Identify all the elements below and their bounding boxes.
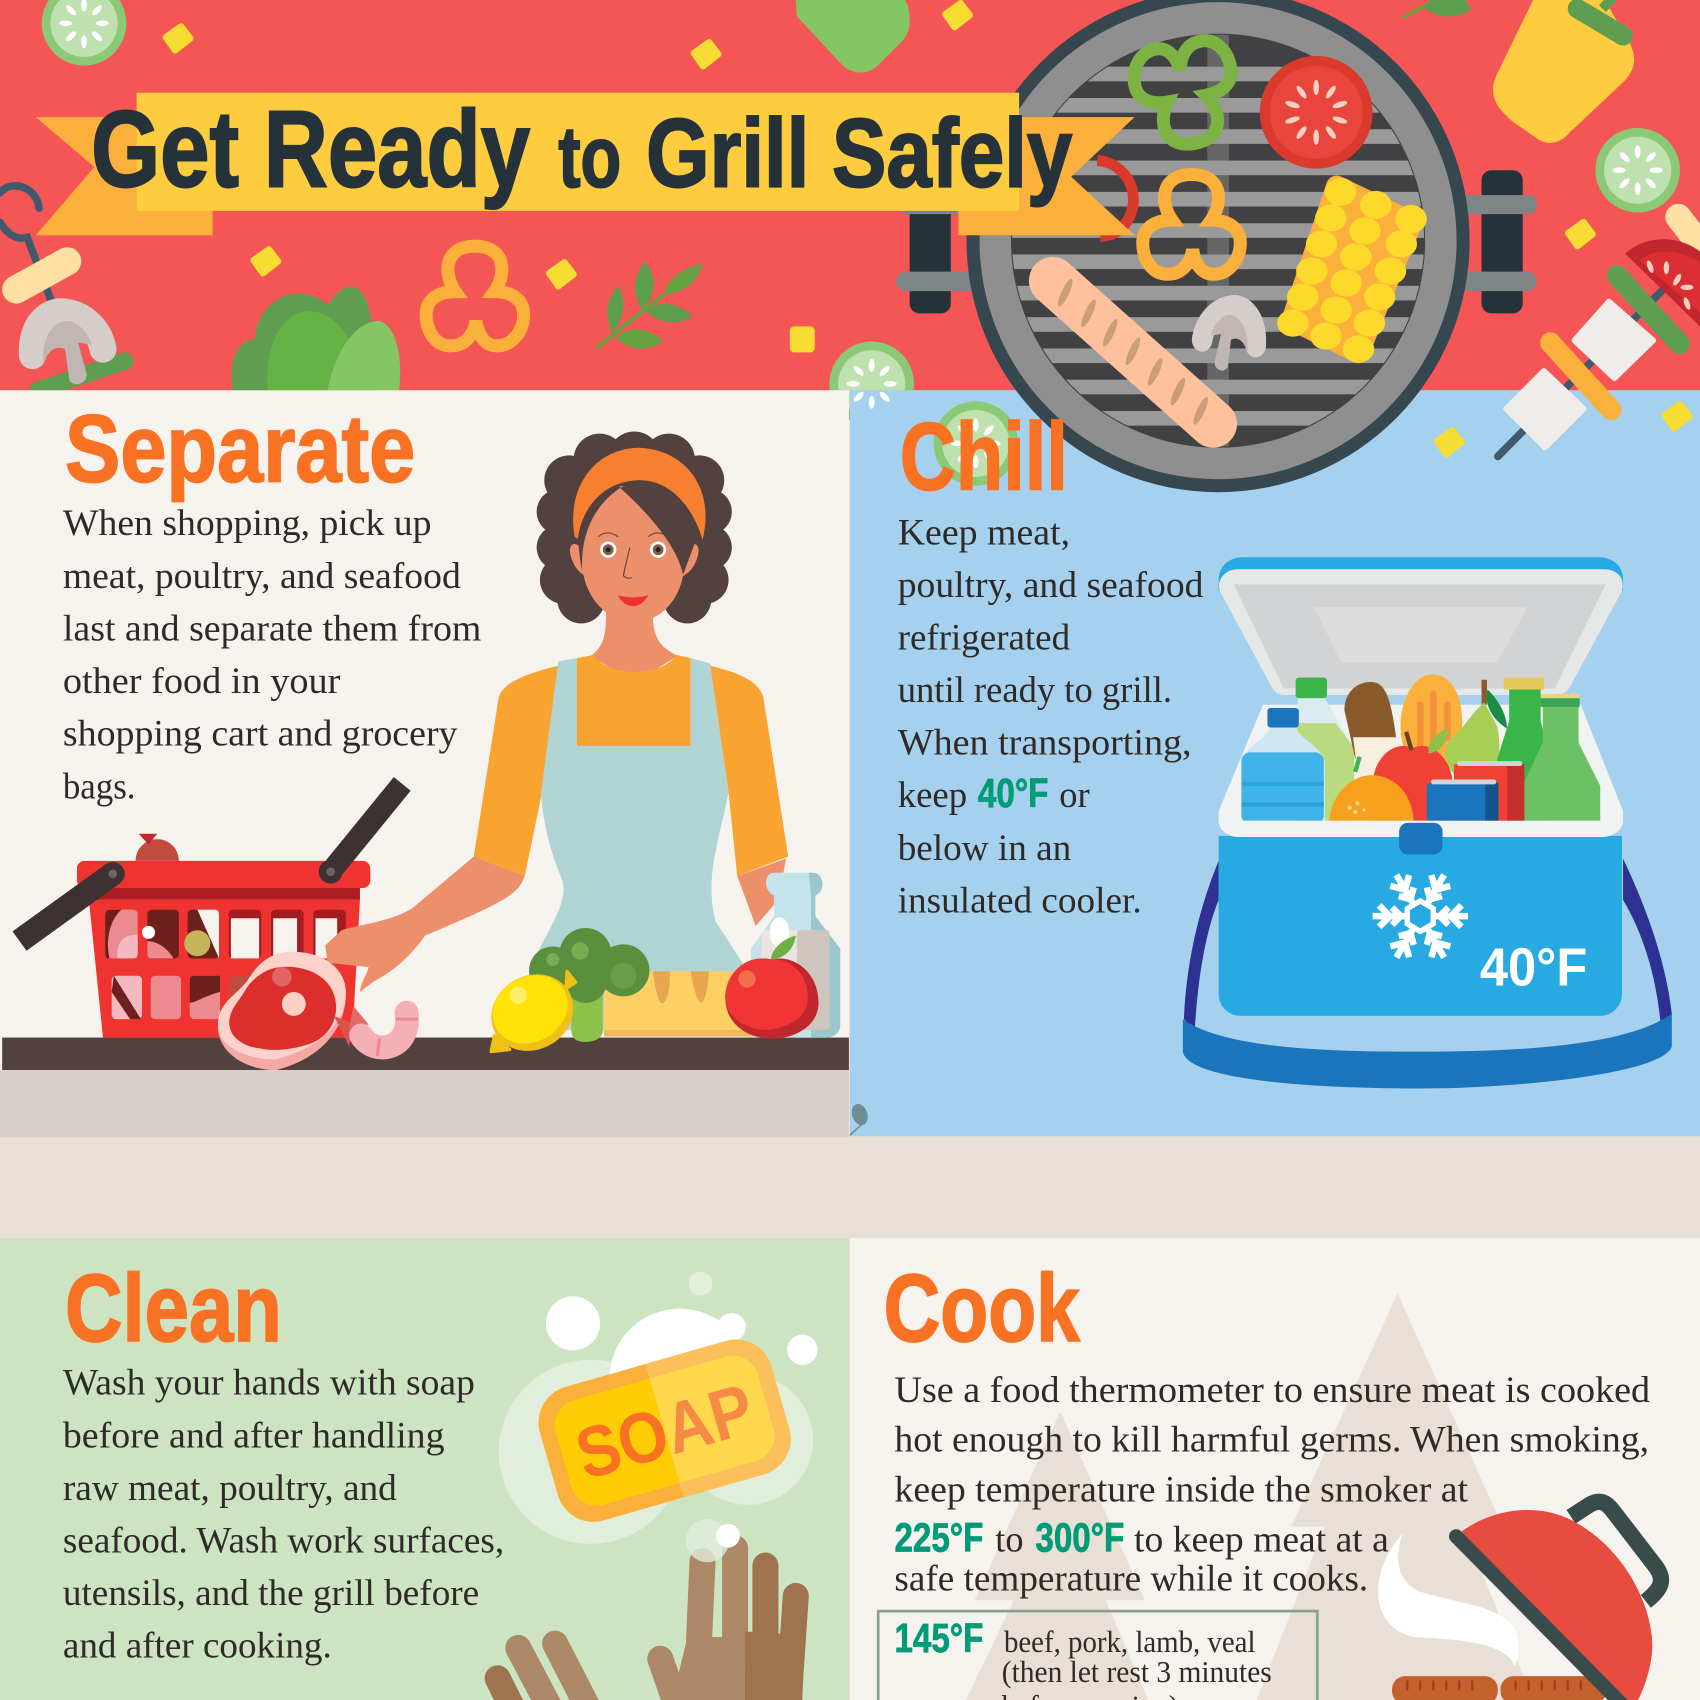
illustration: trees [966, 1293, 1533, 1700]
temperature box: beef, pork, lamb, veal [1004, 1625, 1255, 1659]
text block: cook body: hot enough to kill harmful germs. When smoking, [894, 1419, 1649, 1460]
heading: Cook: Cook [884, 1256, 1081, 1362]
text block: separate body: meat, poultry, and seafood [63, 555, 461, 596]
green pepper ring [1129, 37, 1243, 152]
illustration: woman in apron [474, 432, 788, 1030]
text block: cook body: keep temperature inside the smoker at [894, 1469, 1469, 1510]
icon: soap bar [530, 1331, 799, 1531]
text block: chill body: keep [898, 774, 967, 815]
cooler body [1219, 836, 1622, 1016]
red pepper ring under ribbon [1097, 160, 1133, 236]
panel: Cook [850, 1238, 1700, 1700]
text block: cook body: safe temperature while it cooks. [894, 1557, 1368, 1598]
panel: Separate [0, 390, 849, 1137]
text block: chill body: When transporting, [898, 722, 1192, 763]
cooler interior [1219, 705, 1623, 824]
text block: chill body: 40°F [978, 770, 1048, 816]
icon: shopping basket [20, 784, 402, 1038]
text block: chill body: refrigerated [898, 616, 1070, 657]
text block: cook body: to [995, 1518, 1023, 1559]
orange pepper ring on grill [1143, 175, 1240, 274]
icon: cucumber behind Chill [933, 401, 1018, 486]
illustration: counter [0, 1038, 849, 1137]
panel: Chill background [849, 390, 1700, 1136]
icon: milk bottle [751, 873, 840, 1038]
icon: green pepper top [796, 0, 910, 73]
icon: small leaf at panel corner [849, 1102, 871, 1135]
icon: broccoli [529, 928, 649, 1042]
text block: cook body: 300°F [1035, 1514, 1124, 1560]
icon: steam [1378, 1533, 1519, 1666]
text block: chill body: Keep meat, [898, 511, 1070, 552]
cooler contents [1241, 674, 1600, 824]
icon: lettuce [232, 287, 400, 390]
heading: Chill: Chill [900, 405, 1068, 511]
title text: Grill Safely [646, 98, 1072, 207]
icon: orange pepper ring [426, 246, 524, 346]
illustration: arm and hand [325, 857, 525, 992]
illustration: grill [896, 0, 1537, 492]
temperature box [878, 1611, 1317, 1700]
text block: chill body: below in an [898, 827, 1071, 868]
text block: separate body: shopping cart and grocery [63, 713, 458, 754]
corn [1277, 178, 1427, 363]
cooler rim [1219, 821, 1623, 837]
text block: clean body: utensils, and the grill before [63, 1572, 479, 1613]
grill legs [896, 170, 1537, 313]
icon: lemon [477, 960, 587, 1066]
panel: Clean [0, 1238, 849, 1700]
icon: soap bubbles [499, 1272, 817, 1544]
icon: steak [218, 952, 346, 1070]
icon: sausages [1392, 1676, 1606, 1700]
grill body [967, 0, 1470, 492]
cooler temperature label: 40°F [1480, 938, 1587, 998]
icon: yellow pepper [1493, 0, 1634, 143]
title text: Get Ready [91, 88, 530, 209]
icon: snowflake [1373, 869, 1468, 963]
ribbon tails [36, 117, 1135, 235]
text block: cook body: to keep meat at a [1134, 1518, 1389, 1559]
text block: separate body: other food in your [63, 660, 340, 701]
temperature box: (then let rest 3 minutes [1002, 1655, 1272, 1689]
text block: cook body: Use a food thermometer to ensure meat is cooked [894, 1369, 1650, 1410]
right skewer [1498, 217, 1700, 456]
temperature box: 145°F [894, 1615, 983, 1661]
strap [1183, 859, 1672, 1089]
text block: chill body: or [1059, 774, 1090, 815]
heading: Separate: Separate [65, 396, 415, 502]
icon: soap bar: SOAP [567, 1369, 763, 1495]
icon: apple [725, 936, 819, 1039]
text block: separate body: When shopping, pick up [63, 502, 432, 543]
mushroom on grill [1202, 307, 1256, 371]
title text: to [558, 108, 621, 205]
tomato slice [1260, 56, 1373, 169]
title ribbon [36, 88, 1135, 235]
text block: clean body: before and after handling [63, 1414, 445, 1455]
text block: chill body [898, 511, 1203, 920]
ribbon main [137, 93, 1019, 211]
icon: leaf at top edge [1403, 0, 1471, 17]
text block: chill body: insulated cooler. [898, 879, 1142, 920]
text block: cook body [894, 1369, 1650, 1598]
text block: chill body: until ready to grill. [898, 669, 1172, 710]
cooler clasp [1399, 823, 1443, 854]
icon: herb sprig [597, 261, 703, 349]
banner: red header with scattered food [0, 0, 1700, 426]
title text [91, 88, 1072, 209]
heading: Clean: Clean [65, 1256, 282, 1362]
text block: separate body: last and separate them from [63, 607, 482, 648]
text block: separate body [63, 502, 482, 806]
text block: clean body: and after cooking. [63, 1625, 332, 1666]
text block: separate body: bags. [63, 765, 136, 806]
illustration: cooler [1183, 557, 1672, 1089]
text block: chill body: poultry, and seafood [898, 564, 1203, 605]
icon: left skewer with mushroom [0, 186, 125, 390]
icon: shrimp [334, 1006, 417, 1056]
text block: clean body: Wash your hands with soap [63, 1361, 475, 1402]
text block: cook body: 225°F [894, 1514, 983, 1560]
icon: bread loaf [604, 971, 759, 1036]
icon: hands [498, 1519, 804, 1700]
sausage on grill [1053, 277, 1213, 426]
icon: smoker lid [1456, 1502, 1661, 1700]
scattered items over blue panel [847, 359, 1689, 454]
text block: clean body [63, 1361, 504, 1666]
text block: clean body: raw meat, poultry, and [63, 1467, 397, 1508]
cooler lid [1219, 557, 1623, 695]
text block: clean body: seafood. Wash work surfaces, [63, 1520, 504, 1561]
